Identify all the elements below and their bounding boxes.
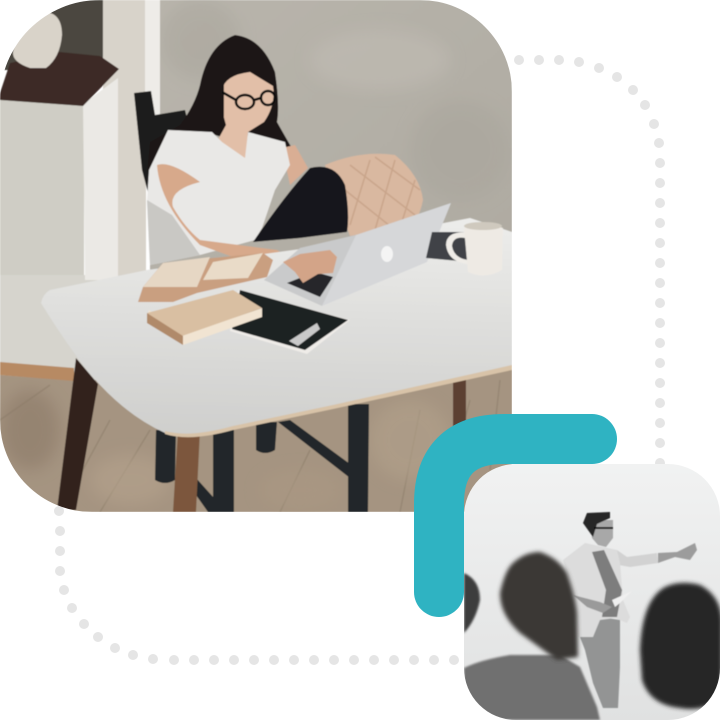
hand (658, 543, 697, 563)
left head (464, 573, 480, 633)
notebook label (289, 323, 320, 346)
neck and face (215, 72, 274, 160)
mug (446, 222, 503, 276)
sleeve (617, 550, 658, 567)
pants (253, 167, 348, 242)
photo: woman studying at a table (0, 0, 512, 512)
hand (283, 250, 337, 283)
small book by mug (426, 232, 470, 262)
background (464, 464, 720, 720)
presenter (563, 512, 697, 708)
shirt (592, 550, 622, 617)
shelf (0, 52, 119, 106)
head (590, 520, 613, 547)
woman (147, 35, 348, 268)
wood table legs (452, 380, 466, 426)
wood trim (0, 362, 74, 381)
legs (578, 617, 620, 708)
laptop lid (322, 203, 451, 306)
table top (41, 218, 512, 436)
basket pouf (325, 154, 423, 236)
tablet (612, 591, 632, 607)
wall (150, 0, 512, 300)
jacket (563, 543, 630, 637)
top hair strip (220, 84, 225, 117)
arm (156, 164, 280, 256)
pedestal (0, 99, 84, 276)
vase (13, 12, 62, 68)
chair (134, 90, 188, 192)
black notebook (230, 290, 350, 354)
column (103, 0, 146, 300)
laptop base (264, 234, 360, 306)
keyboard (287, 272, 333, 297)
photo: presenter with audience (464, 464, 720, 720)
shirt (147, 130, 290, 265)
apple logo (381, 246, 393, 262)
back table legs and crossbars (155, 404, 369, 512)
hair back (163, 34, 291, 148)
closed beige book (147, 290, 262, 345)
open book (138, 253, 273, 302)
right arm (286, 144, 308, 185)
middle person hair (500, 552, 578, 660)
dark niche (0, 0, 104, 70)
forearm (573, 595, 612, 613)
right head (640, 583, 720, 709)
glasses (222, 91, 275, 109)
audience (464, 552, 720, 720)
middle person body (464, 655, 600, 720)
dotted path (54, 55, 665, 665)
teal rounded corner shape (439, 439, 592, 592)
floor (0, 360, 512, 512)
